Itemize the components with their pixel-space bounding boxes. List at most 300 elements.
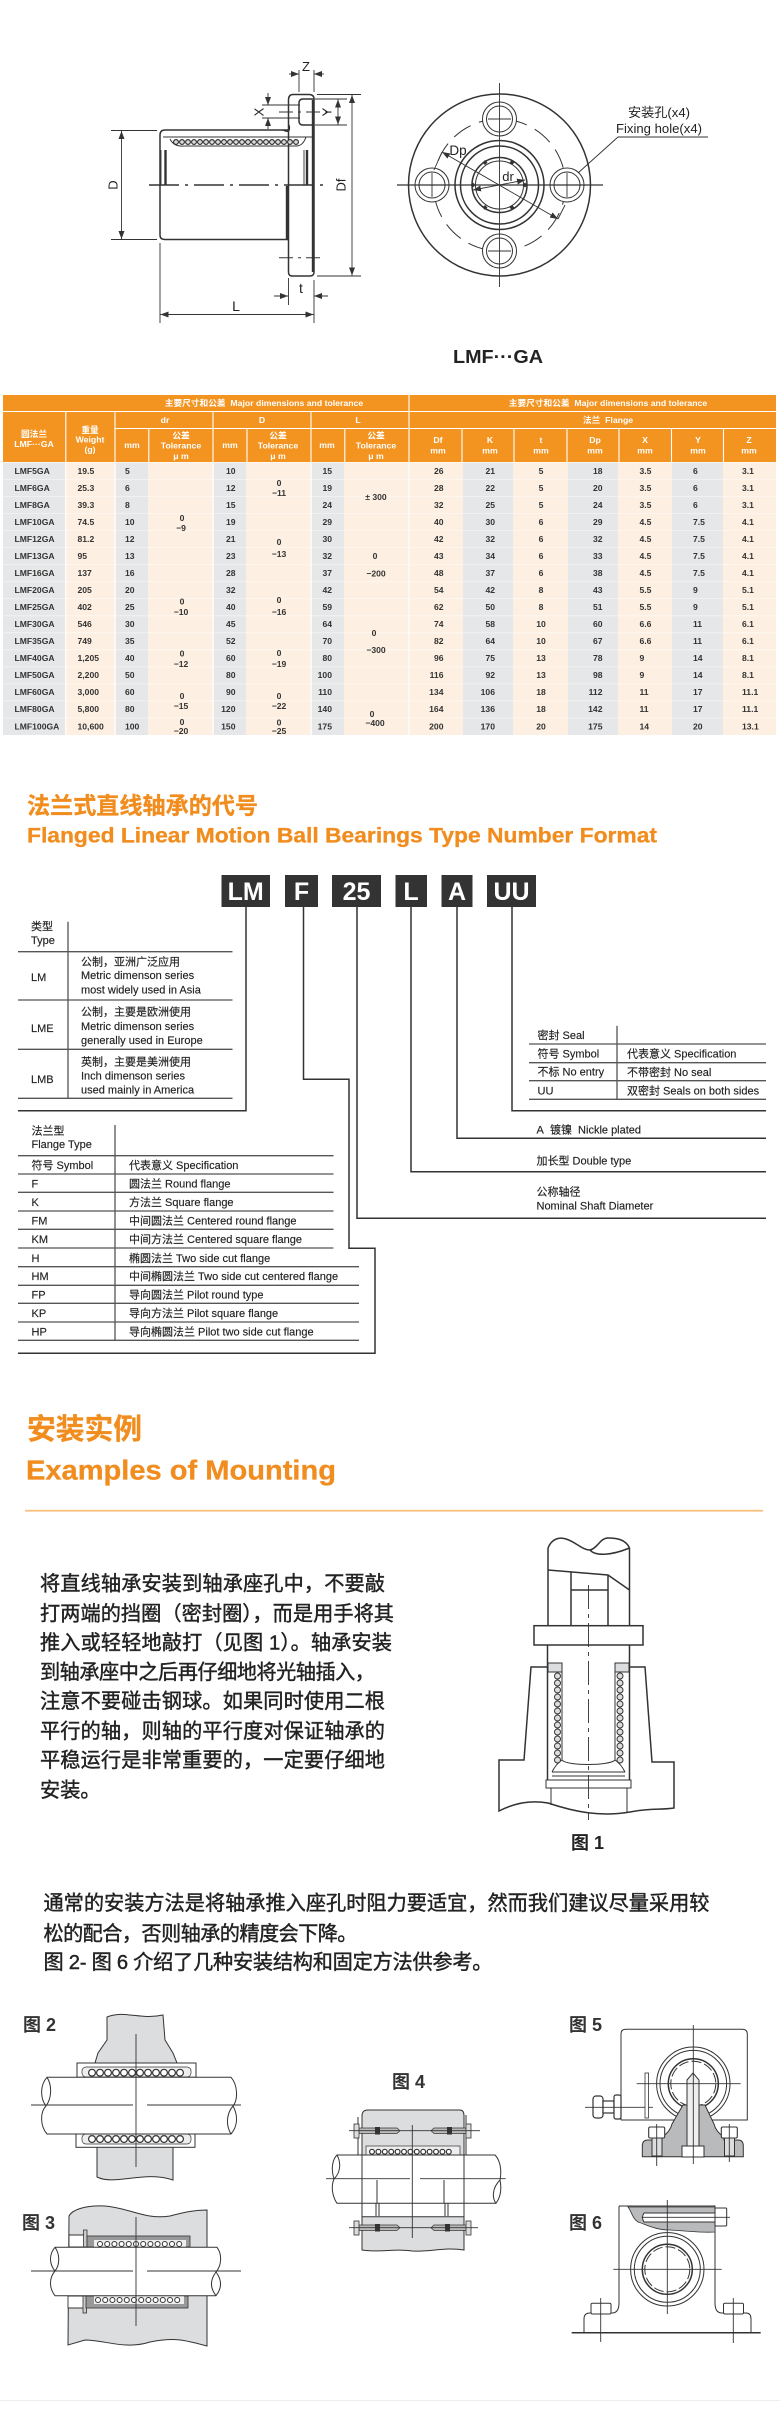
table header: mm <box>124 440 140 450</box>
table header: Tolerance <box>356 440 396 450</box>
tolerance values: 0 <box>180 596 185 606</box>
tolerance values: −300 <box>366 645 386 655</box>
table rows: 24 <box>322 500 332 510</box>
table: seal: 不带密封 No seal <box>627 1065 711 1079</box>
table: flange type: K <box>32 1197 40 1209</box>
bearing rings <box>631 2233 704 2306</box>
shaft <box>42 2077 237 2134</box>
table: seal: 双密封 Seals on both sides <box>627 1084 760 1098</box>
table rows: 5 <box>539 466 544 476</box>
bearing rings <box>657 2047 730 2120</box>
table rows: 64 <box>485 636 495 646</box>
table rows: 62 <box>434 602 444 612</box>
heading: examples of mounting <box>26 1414 336 1485</box>
table rows: 30 <box>322 534 332 544</box>
table: flange type: F <box>32 1178 38 1190</box>
table header: LMF···GA <box>14 439 55 449</box>
paragraph: mounting instructions <box>40 1572 394 1802</box>
flange outline <box>283 94 314 276</box>
table rows: 9 <box>640 670 644 680</box>
table rows: 112 <box>589 687 603 697</box>
table rows: 19 <box>322 483 332 493</box>
table rows: 29 <box>322 517 332 527</box>
ball row <box>366 2146 460 2155</box>
figure 2: 图 2 <box>23 2015 56 2035</box>
table rows: 28 <box>434 483 444 493</box>
table background <box>3 395 776 735</box>
table header: dr <box>161 415 170 425</box>
figure 3: 图 3 <box>22 2213 55 2233</box>
housing <box>68 2206 207 2346</box>
table rows: 11 <box>693 619 702 629</box>
table rows: 4.1 <box>742 517 754 527</box>
table rows: 134 <box>429 687 444 697</box>
tolerance values: 0 <box>180 691 185 701</box>
paragraph: mounting methods: 松的配合，否则轴承的精度会下降。 <box>44 1922 358 1946</box>
table rows: LMF6GA <box>14 483 50 493</box>
figure 1: bearing mounted in housing <box>499 1538 674 1820</box>
dimension dr: dr <box>502 169 514 184</box>
dimension Z: Z <box>302 59 310 74</box>
table rows: 42 <box>485 585 495 595</box>
table: flange type: 代表意义 Specification <box>129 1158 238 1172</box>
label: double type: 加长型 Double type <box>536 1154 631 1168</box>
table rows: 6.1 <box>742 619 754 629</box>
table rows: 40 <box>125 653 135 663</box>
table rows: 40 <box>226 602 236 612</box>
table: flange type: 导向方法兰 Pilot square flange <box>129 1306 278 1320</box>
dimension t: t <box>299 280 303 296</box>
type number code boxes: LM <box>228 878 264 906</box>
table rows: 38 <box>593 568 603 578</box>
table rows: 40 <box>434 517 444 527</box>
table rows: 21 <box>226 534 236 544</box>
ball track markers <box>470 160 528 210</box>
table rows: 11.1 <box>742 704 758 714</box>
tolerance values: −25 <box>272 726 287 736</box>
table rows: 20 <box>536 722 546 732</box>
base line <box>572 2332 761 2334</box>
table rows: 32 <box>593 534 603 544</box>
table header: X <box>642 435 648 445</box>
type number code boxes <box>222 875 536 907</box>
table: seal: 代表意义 Specification <box>627 1047 736 1061</box>
table: flange type: 导向椭圆法兰 Pilot two side cut flange <box>129 1324 314 1338</box>
table rows: 749 <box>78 636 92 646</box>
table: bearing type: 英制，主要是美洲使用 <box>81 1055 191 1069</box>
table header: Tolerance <box>161 440 201 450</box>
paragraph: mounting instructions: 安装。 <box>40 1779 101 1802</box>
foot bolts <box>591 2298 744 2343</box>
table rows: 15 <box>322 466 332 476</box>
heading: type number format: Flanged Linear Motion Ball Bearings Type Number Format <box>27 824 657 848</box>
table rows: 3.1 <box>742 483 754 493</box>
table header: 主要尺寸和公差 Major dimensions and tolerance <box>509 397 707 408</box>
table rows: 6.6 <box>640 636 652 646</box>
table rows: 5.5 <box>640 585 652 595</box>
table rows: 32 <box>322 551 332 561</box>
table rows: LMF40GA <box>14 653 55 663</box>
table rows: 32 <box>434 500 444 510</box>
dimension Z <box>289 59 324 92</box>
end plates <box>358 2115 466 2250</box>
tolerance values: −19 <box>272 659 287 669</box>
table rows: 6 <box>693 500 698 510</box>
figure 6: 图 6 <box>569 2213 602 2233</box>
table rows: 74 <box>434 619 444 629</box>
tolerance values: 0 <box>180 648 185 658</box>
table rows: 16 <box>125 568 135 578</box>
table rows: 4.5 <box>640 534 652 544</box>
table rows: 140 <box>318 704 332 714</box>
table rows: 6 <box>693 483 698 493</box>
table rows: 5.5 <box>640 602 652 612</box>
table header: 主要尺寸和公差 Major dimensions and tolerance <box>165 397 363 408</box>
figure 3 <box>22 2206 241 2346</box>
table header: mm <box>482 446 498 456</box>
table rows: 7.5 <box>693 517 705 527</box>
housing block <box>621 2029 747 2120</box>
table: flange type: HM <box>32 1271 49 1283</box>
table header: (g) <box>84 444 96 454</box>
tolerance values: −200 <box>366 568 386 578</box>
type number code boxes: 25 <box>343 878 370 906</box>
tolerance values: 0 <box>277 537 282 547</box>
table rows: 78 <box>593 653 603 663</box>
table rows: LMF35GA <box>14 636 55 646</box>
table: flange type: 方法兰 Square flange <box>129 1195 234 1209</box>
callout: fixing hole: Fixing hole(x4) <box>616 121 702 136</box>
table rows: 98 <box>593 670 603 680</box>
paragraph: mounting methods <box>44 1892 710 1974</box>
table rows: 59 <box>322 602 332 612</box>
table rows: 33 <box>593 551 603 561</box>
table: flange type: 中间圆法兰 Centered round flange <box>129 1214 297 1228</box>
table: bearing type: 公制，主要是欧洲使用 <box>81 1006 191 1019</box>
shaft <box>332 2155 501 2203</box>
table: flange type: FP <box>32 1290 46 1302</box>
table header: Dp <box>589 435 601 445</box>
callout: fixing hole <box>578 105 708 173</box>
table rows: 10 <box>125 517 135 527</box>
table rows: 6 <box>539 517 544 527</box>
table header: mm <box>430 446 446 456</box>
table rows: 142 <box>588 704 603 714</box>
figure 5 <box>569 2015 747 2166</box>
centre rings <box>455 140 544 230</box>
table rows: 5 <box>125 466 130 476</box>
tolerance values: −20 <box>174 726 189 736</box>
table rows: 2,200 <box>78 670 99 680</box>
table rows: 3.1 <box>742 466 754 476</box>
shaft recess <box>68 2235 85 2308</box>
table: bearing type: most widely used in Asia <box>81 984 202 996</box>
lower bearing <box>76 2134 195 2147</box>
figure 1 caption: 图 1 <box>571 1833 604 1853</box>
table rows: 15 <box>226 500 236 510</box>
table: bearing type: 类型 <box>31 919 53 933</box>
table rows: 120 <box>221 704 236 714</box>
table rows: 60 <box>125 687 135 697</box>
table header: Weight <box>76 434 105 444</box>
table rows: 3,000 <box>78 687 99 697</box>
paragraph: mounting instructions: 到轴承座中之后再仔细地将光轴插入， <box>40 1661 375 1684</box>
table rows: 75 <box>485 653 495 663</box>
table rows: 5,800 <box>78 704 99 714</box>
tolerance values: 0 <box>373 551 378 561</box>
tolerance values: −15 <box>174 701 189 711</box>
table: flange type: 符号 Symbol <box>32 1159 93 1172</box>
table rows: 74.5 <box>78 517 94 527</box>
table rows: 80 <box>125 704 135 714</box>
label: nominal shaft diameter: 公称轴径 <box>536 1185 580 1199</box>
table rows: 19 <box>226 517 236 527</box>
table header: μ m <box>368 451 384 461</box>
table rows: 20 <box>693 722 703 732</box>
table: flange type: KM <box>32 1234 48 1246</box>
table: seal: 密封 Seal <box>538 1028 585 1042</box>
table rows: 205 <box>78 585 92 595</box>
tolerance values: −11 <box>272 488 286 498</box>
table rows: 7.5 <box>693 534 705 544</box>
lower housing <box>362 2217 464 2251</box>
table rows: LMF30GA <box>14 619 55 629</box>
centre lines <box>31 2034 241 2167</box>
dimension Dp <box>434 143 565 219</box>
table: bearing type: LME <box>31 1023 54 1035</box>
tolerance values: 0 <box>277 691 282 701</box>
dimension X: X <box>252 107 266 116</box>
bolt circle <box>434 119 566 251</box>
type number code boxes: L <box>403 878 419 906</box>
dimension Dp: Dp <box>449 143 467 158</box>
table rows: 32 <box>226 585 236 595</box>
table rows: 11 <box>640 704 649 714</box>
table rows: 9 <box>693 585 698 595</box>
table rows: 4.5 <box>640 517 652 527</box>
table rows: 3.5 <box>640 500 652 510</box>
figure 2 <box>23 2014 241 2180</box>
shaft with break line <box>548 1538 630 1625</box>
table rows: 21 <box>485 466 495 476</box>
table rows: 26 <box>434 466 444 476</box>
side view technical drawing of the bearing <box>106 59 361 323</box>
table rows: 22 <box>485 483 495 493</box>
table rows: LMF60GA <box>14 687 55 697</box>
top bolt <box>642 2208 730 2226</box>
table: flange type: Flange Type <box>32 1139 92 1151</box>
table rows: 10 <box>536 619 546 629</box>
upper housing <box>362 2110 464 2155</box>
table header: mm <box>741 446 757 456</box>
table rows: LMF13GA <box>14 551 55 561</box>
table: flange type: FM <box>32 1216 47 1228</box>
table rows: 14 <box>693 653 703 663</box>
paragraph: mounting instructions: 将直线轴承安装到轴承座孔中，不要敲 <box>40 1572 385 1596</box>
table rows: 6 <box>539 551 544 561</box>
table: bearing type: Metric dimenson series <box>81 1021 195 1033</box>
figure 4: 图 4 <box>392 2072 425 2092</box>
table rows: 9 <box>693 602 698 612</box>
table rows: LMF25GA <box>14 602 55 612</box>
table rows: 13 <box>125 551 135 561</box>
table rows: 60 <box>226 653 236 663</box>
table rows: 37 <box>322 568 332 578</box>
table rows: 25.3 <box>78 483 94 493</box>
table rows: 7.5 <box>693 551 705 561</box>
table rows: 12 <box>125 534 135 544</box>
centre lines <box>31 2217 241 2326</box>
adjusting screw <box>585 2073 653 2119</box>
table rows: 25 <box>485 500 495 510</box>
heading: type number format <box>27 792 657 848</box>
table header: μ m <box>270 451 286 461</box>
table rows: 17 <box>693 704 703 714</box>
table: bearing type: LM <box>31 972 46 984</box>
table rows: 37 <box>485 568 495 578</box>
table: flange type <box>18 1124 359 1340</box>
table rows: 70 <box>322 636 332 646</box>
table rows: 175 <box>318 722 332 732</box>
table rows: 13.1 <box>742 722 759 732</box>
table rows: 8.1 <box>742 653 754 663</box>
table rows: 10 <box>536 636 546 646</box>
figure 6 <box>569 2200 761 2343</box>
cut-away section <box>628 2207 715 2232</box>
table rows: 164 <box>429 704 444 714</box>
table rows <box>14 466 759 732</box>
table header: K <box>487 435 494 445</box>
table rows: 50 <box>485 602 495 612</box>
table rows: 1,205 <box>78 653 99 663</box>
table rows: 4.5 <box>640 551 652 561</box>
table: seal: UU <box>538 1086 553 1098</box>
centre lines <box>613 2200 722 2314</box>
housing <box>95 2014 177 2063</box>
table rows: 137 <box>78 568 92 578</box>
table rows: 39.3 <box>78 500 94 510</box>
table: flange type: H <box>32 1253 40 1265</box>
table: seal: 符号 Symbol <box>538 1047 599 1060</box>
press flange <box>534 1626 643 1645</box>
table rows: 4.1 <box>742 534 754 544</box>
label: nickle plated: A 镀镍 Nickle plated <box>536 1122 641 1136</box>
dimension Y <box>315 99 347 125</box>
type number code boxes: F <box>294 878 309 906</box>
front view technical drawing of the flange <box>397 83 708 287</box>
table header: μ m <box>173 451 189 461</box>
table: flange type: 椭圆法兰 Two side cut flange <box>129 1251 270 1265</box>
seals and centre lines <box>166 100 313 272</box>
table header: 圆法兰 <box>21 428 47 439</box>
table rows: 20 <box>593 483 603 493</box>
retaining ring <box>546 1780 631 1788</box>
tolerance values: 0 <box>277 718 282 728</box>
table rows: 5 <box>539 500 544 510</box>
dimension L <box>160 243 314 323</box>
housing <box>499 1645 674 1814</box>
figure 5: 图 5 <box>569 2015 602 2035</box>
table: bearing type: LMB <box>31 1074 54 1086</box>
table rows: 12 <box>226 483 236 493</box>
paragraph: mounting methods: 图 2- 图 6 介绍了几种安装结构和固定方法供参考。 <box>44 1951 492 1974</box>
table rows: 116 <box>430 670 444 680</box>
table rows: 8 <box>539 585 544 595</box>
type number code boxes: A <box>448 878 466 906</box>
model caption: LMF···GA <box>453 346 543 367</box>
table rows: 4.5 <box>640 568 652 578</box>
table rows: LMF20GA <box>14 585 55 595</box>
table rows: 82 <box>434 636 444 646</box>
table rows: 58 <box>485 619 495 629</box>
table rows: 60 <box>593 619 603 629</box>
table rows: 34 <box>485 551 495 561</box>
table rows: 3.1 <box>742 500 754 510</box>
shaft <box>50 2247 221 2296</box>
centre lines <box>326 2125 506 2238</box>
table header <box>14 397 757 461</box>
table rows: 6 <box>539 534 544 544</box>
table rows: 64 <box>322 619 332 629</box>
heading: examples of mounting: Examples of Mounting <box>26 1454 336 1485</box>
table: bearing type: 公制，亚洲广泛应用 <box>81 955 180 969</box>
fixing bolts <box>349 2124 480 2235</box>
upper bearing <box>77 2063 196 2077</box>
paragraph: mounting instructions: 平行的轴，则轴的平行度对保证轴承的 <box>40 1720 385 1743</box>
foot bolts <box>649 2124 737 2166</box>
table header: mm <box>690 446 706 456</box>
upper bearing <box>84 2230 190 2248</box>
table header: t <box>540 435 543 445</box>
tolerance values: −10 <box>174 607 189 617</box>
dimension dr <box>473 169 525 190</box>
fixing holes <box>415 102 584 268</box>
paragraph: mounting methods: 通常的安装方法是将轴承推入座孔时阻力要适宜，然而我们建议尽量采用较 <box>44 1892 710 1915</box>
table rows: 6.6 <box>640 619 652 629</box>
table rows: LMF8GA <box>14 500 50 510</box>
table: bearing type: Type <box>31 935 55 947</box>
table rows: LMF5GA <box>14 466 50 476</box>
table rows: 96 <box>434 653 444 663</box>
table rows: 30 <box>485 517 495 527</box>
table header: Df <box>433 435 443 445</box>
table header: mm <box>587 446 603 456</box>
table rows: 175 <box>588 722 603 732</box>
table rows: 11 <box>693 636 702 646</box>
table rows: LMF100GA <box>14 722 59 732</box>
paragraph: mounting instructions: 推入或轻轻地敲打（见图 1）。轴承安装 <box>40 1632 392 1654</box>
tolerance values: 0 <box>277 478 282 488</box>
tolerance values: −13 <box>272 549 287 559</box>
table rows: 3.5 <box>640 483 652 493</box>
table rows: 110 <box>318 687 332 697</box>
table header: mm <box>637 446 653 456</box>
table rows: 51 <box>593 602 603 612</box>
table rows: 28 <box>226 568 236 578</box>
table rows: 150 <box>221 722 236 732</box>
table rows: 10 <box>226 466 236 476</box>
table rows: 43 <box>593 585 603 595</box>
type number code boxes: UU <box>493 878 530 906</box>
table rows: 8 <box>539 602 544 612</box>
table rows: 10,600 <box>78 722 104 732</box>
dimension L: L <box>232 298 240 314</box>
table rows: 136 <box>481 704 495 714</box>
paragraph: mounting instructions: 打两端的挡圈（密封圈），而是用手将其 <box>40 1602 394 1626</box>
table rows: 5.1 <box>742 602 754 612</box>
table rows: 42 <box>434 534 444 544</box>
support base <box>642 2105 743 2157</box>
